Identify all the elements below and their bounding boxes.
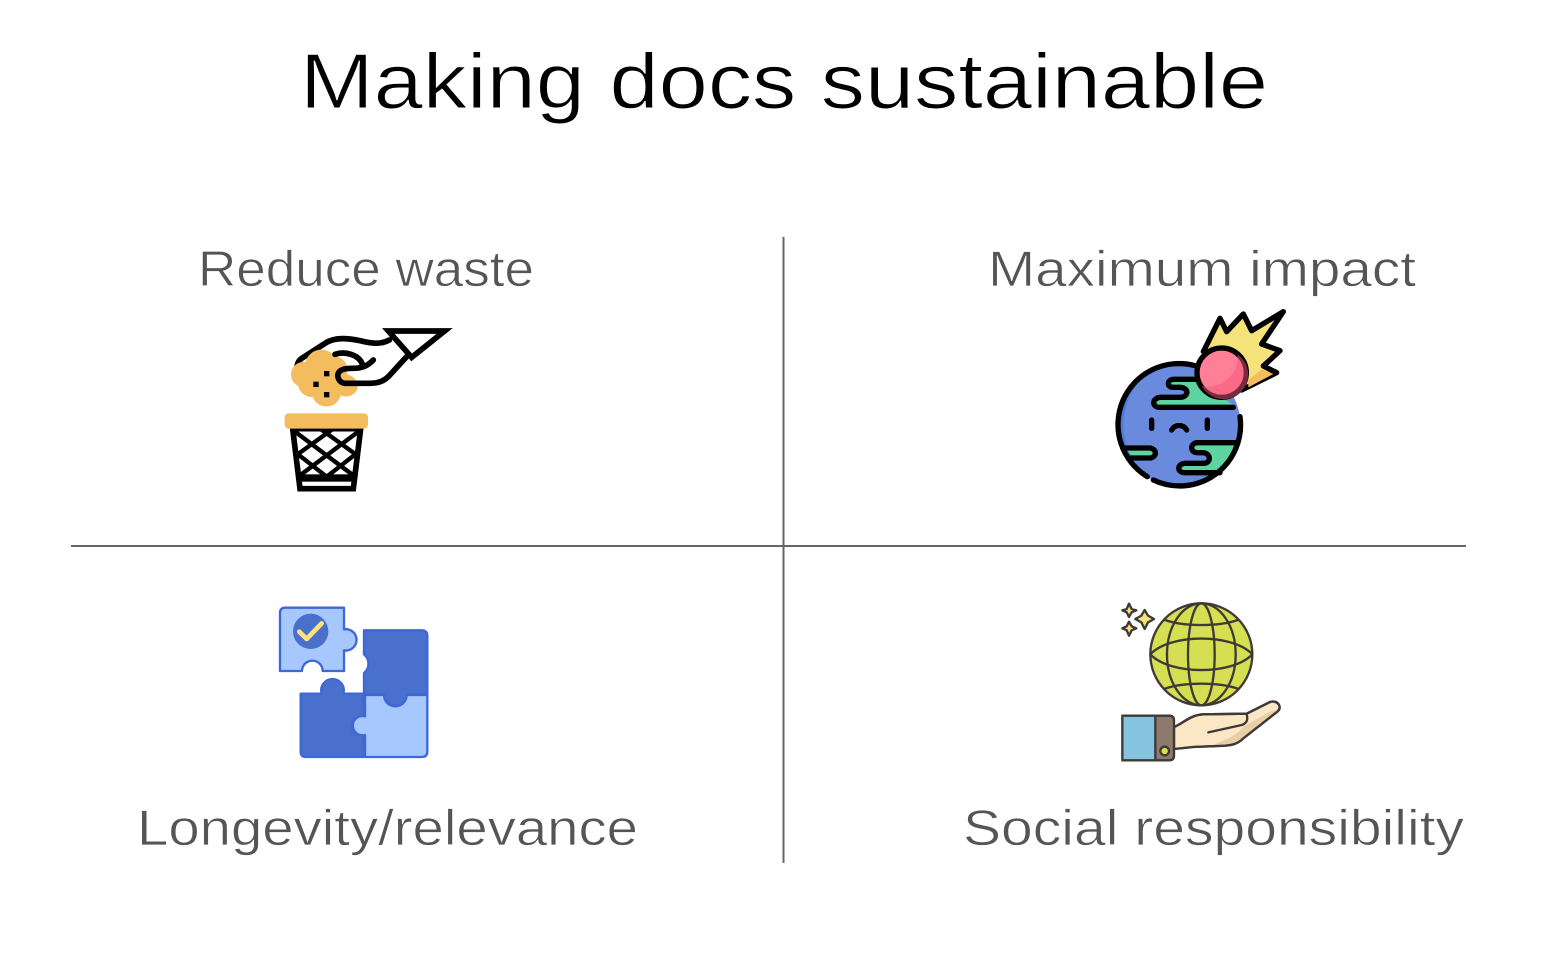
heading: longevity/relevance: Longevity/relevance bbox=[137, 800, 638, 856]
panel: maximum impact bbox=[988, 241, 1416, 486]
panel: social responsibility bbox=[963, 603, 1464, 856]
heading: social responsibility: Social responsibility bbox=[963, 800, 1464, 856]
icon: meteor hitting planet bbox=[1118, 312, 1283, 486]
title: Making docs sustainable bbox=[300, 37, 1268, 125]
heading: maximum impact: Maximum impact bbox=[988, 241, 1416, 297]
heading: reduce waste: Reduce waste bbox=[198, 241, 534, 297]
panel: longevity/relevance bbox=[137, 608, 638, 856]
icon: puzzle pieces with check mark bbox=[280, 608, 427, 757]
panel: reduce waste bbox=[198, 241, 534, 489]
icon: hand dropping waste into basket bbox=[285, 331, 445, 489]
icon: hand holding globe with sparkles bbox=[1122, 603, 1280, 760]
